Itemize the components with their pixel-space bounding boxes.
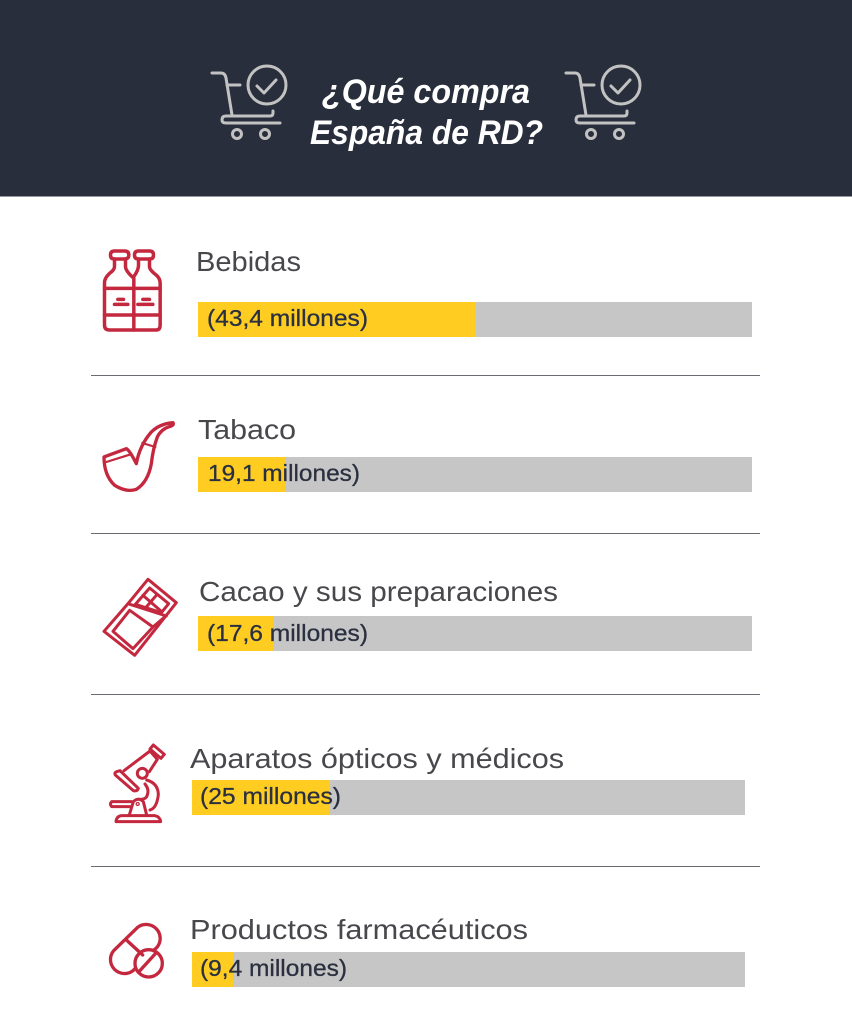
row: Cacao	[104, 576, 752, 655]
icon: shopping cart right	[566, 66, 640, 138]
bar: 25 millones	[192, 780, 745, 815]
title	[310, 73, 543, 152]
title: España de RD?	[310, 114, 543, 152]
bar: 19,1 millones: 19,1 millones)	[208, 460, 360, 486]
icon: shopping cart left	[212, 66, 286, 138]
bar: 9,4 millones	[192, 952, 745, 987]
icon: bottles	[104, 251, 160, 330]
bar: 17,6 millones: (17,6 millones)	[207, 620, 368, 646]
icon: pipe	[104, 423, 173, 490]
bar: 17,6 millones	[198, 616, 752, 651]
icon: pills	[110, 924, 162, 977]
row: Productos farmacéuticos	[110, 914, 745, 987]
bar: 43,4 millones	[198, 302, 752, 337]
row: Aparatos	[110, 743, 745, 822]
label: Tabaco	[198, 414, 296, 445]
label: Cacao y sus preparaciones	[199, 576, 558, 607]
row: Tabaco	[104, 414, 752, 492]
bar: 25 millones: (25 millones)	[200, 783, 341, 809]
bar: 43,4 millones: (43,4 millones)	[207, 305, 368, 331]
label: Aparatos ópticos y médicos	[190, 743, 564, 774]
icon: chocolate bar	[104, 579, 176, 655]
label: Bebidas	[196, 246, 301, 277]
row: Bebidas	[104, 246, 752, 337]
bar: 19,1 millones	[198, 457, 752, 492]
label: Productos farmacéuticos	[190, 914, 528, 945]
bar: 9,4 millones: (9,4 millones)	[200, 955, 347, 981]
icon: microscope	[110, 745, 164, 822]
header band	[0, 0, 852, 196]
title: ¿Qué compra	[322, 73, 530, 111]
